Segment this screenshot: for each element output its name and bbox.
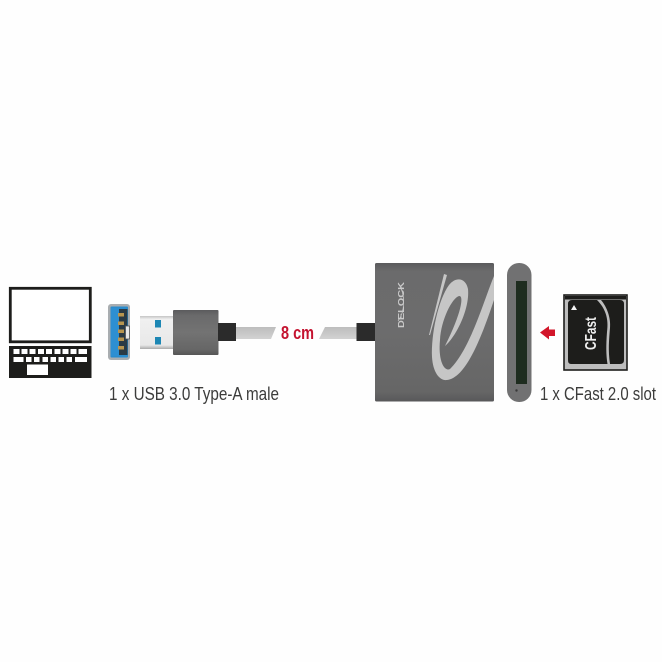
LED dot: [515, 389, 518, 392]
CFast card: [564, 295, 627, 370]
cable length label: 8 cm: [281, 322, 314, 343]
cable left segment: [236, 327, 276, 339]
card triangle mark: [571, 305, 577, 310]
cable strain relief right: [356, 323, 375, 341]
USB plug: [140, 310, 236, 355]
label: USB connector: 1 x USB 3.0 Type-A male: [109, 383, 279, 404]
logo: DELOCK wordmark: DELOCK: [396, 281, 406, 328]
card reader slot side: [507, 263, 532, 402]
plug: metal tip: [140, 316, 174, 349]
slot opening: [516, 281, 527, 384]
card reader body: [375, 263, 494, 402]
logo: swoosh e: [429, 274, 494, 380]
icon: laptop: [9, 288, 92, 378]
arrow: insertion direction: [540, 326, 555, 340]
plug: strain relief: [218, 323, 236, 341]
card label: CFast: [583, 317, 600, 350]
icon: USB 3.0 socket: [108, 304, 130, 360]
cable right segment: [319, 327, 357, 339]
plug: grey housing: [173, 310, 218, 355]
